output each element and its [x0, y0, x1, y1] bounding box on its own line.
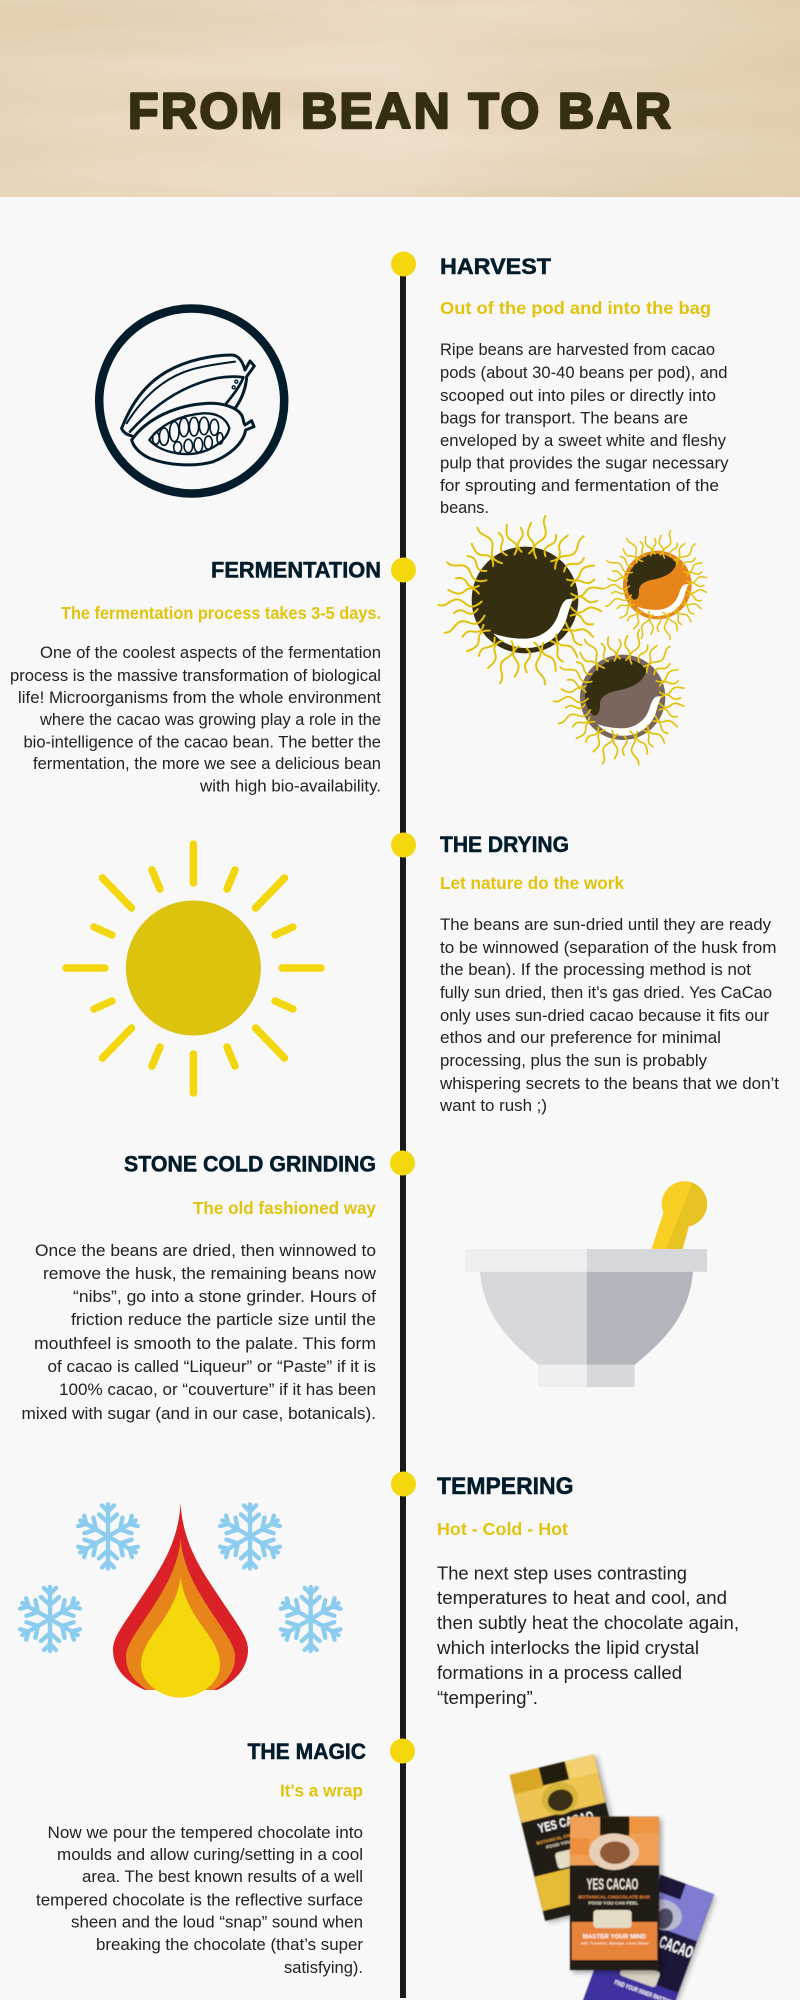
package: orange: FOOD YOU CAN FEEL — [588, 1900, 639, 1905]
text block: the drying — [439, 916, 779, 1115]
text block: the magic: sheen and the loud “snap” sound when — [71, 1914, 363, 1932]
text block: the drying: fully sun dried, then it’s gas dried. Yes CaCao — [440, 984, 772, 1002]
subheading: tempering: Hot - Cold - Hot — [437, 1519, 568, 1539]
text block: tempering: temperatures to heat and cool, and — [437, 1587, 727, 1608]
text block: fermentation: where the cacao was growing play a role in the — [39, 711, 381, 729]
text block: the drying: The beans are sun-dried until they are ready — [440, 916, 772, 934]
text block: harvest: bags for transport. The beans are — [440, 410, 688, 428]
text block: the magic: breaking the chocolate (that’s super — [96, 1936, 364, 1954]
timeline with dots — [390, 252, 416, 1998]
text block: fermentation — [10, 644, 381, 796]
package: yellow — [510, 1754, 633, 1924]
text block: harvest: Ripe beans are harvested from cacao — [440, 341, 715, 359]
text block: harvest — [440, 341, 729, 517]
panel: the magic — [36, 1739, 366, 1977]
text block: harvest: enveloped by a sweet white and fleshy — [440, 432, 727, 450]
icon: flame with snowflakes — [18, 1503, 343, 1698]
heading: the magic: THE MAGIC — [248, 1739, 366, 1764]
text block: harvest: for sprouting and fermentation of the — [440, 477, 719, 495]
text block: stone cold grinding: 100% cacao, or “couverture” if it has been — [59, 1381, 376, 1399]
text block: the magic: area. The best known results of a well — [82, 1868, 363, 1886]
text block: tempering — [436, 1562, 739, 1708]
package: orange: with Turmeric, Bacopa, Lions Mane — [581, 1941, 650, 1946]
icon: sun — [66, 844, 321, 1093]
subheading: stone cold grinding: The old fashioned way — [193, 1198, 376, 1218]
text block: harvest: pulp that provides the sugar necessary — [440, 454, 729, 472]
text block: stone cold grinding: “nibs”, go into a stone grinder. Hours of — [73, 1288, 376, 1306]
icon: snowflake — [278, 1587, 343, 1651]
package: purple: YES CACAO — [636, 1924, 696, 1962]
heading: harvest: HARVEST — [440, 254, 552, 279]
text block: fermentation: with high bio-availability. — [199, 778, 381, 796]
text block: the drying: whispering secrets to the beans that we don’t — [439, 1075, 779, 1093]
heading: stone cold grinding: STONE COLD GRINDING — [124, 1152, 376, 1176]
text block: the magic: satisfying). — [284, 1959, 363, 1977]
panel: the drying — [439, 832, 779, 1115]
package: purple — [580, 1865, 717, 2000]
title: FROM BEAN TO BAR — [128, 83, 671, 139]
package: yellow: FOOD YOU CAN FEEL — [546, 1833, 596, 1850]
panel: tempering — [436, 1473, 739, 1708]
subheading: fermentation: The fermentation process takes 3-5 days. — [61, 603, 381, 623]
text block: the drying: ethos and our preference for minimal — [440, 1029, 721, 1047]
icon: snowflake — [18, 1587, 82, 1651]
text block: tempering: which interlocks the lipid crystal — [436, 1637, 699, 1658]
package: orange: YES CACAO — [587, 1876, 638, 1893]
text block: the magic: moulds and allow curing/setting in a cool — [57, 1846, 363, 1864]
heading: fermentation: FERMENTATION — [211, 558, 381, 582]
text block: fermentation: process is the massive transformation of biological — [10, 667, 381, 685]
heading: tempering: TEMPERING — [437, 1473, 574, 1500]
text block: tempering: then subtly heat the chocolate again, — [437, 1612, 739, 1633]
subheading: harvest: Out of the pod and into the bag — [440, 298, 711, 318]
text block: stone cold grinding: Once the beans are dried, then winnowed to — [35, 1242, 376, 1260]
icon: flame — [113, 1503, 248, 1698]
text block: the drying: to be winnowed (separation of the husk from — [440, 939, 776, 957]
text block: stone cold grinding: mouthfeel is smooth to the palate. This form — [34, 1335, 376, 1353]
text block: the drying: only uses sun-dried cacao because it fits our — [440, 1007, 770, 1025]
icon: orange bean — [601, 530, 707, 640]
icon: cacao pod in circle — [99, 308, 284, 494]
text block: fermentation: fermentation, the more we see a delicious bean — [33, 755, 381, 773]
text block: stone cold grinding: remove the husk, the remaining beans now — [43, 1265, 376, 1283]
subheading: the magic: It's a wrap — [280, 1780, 363, 1800]
text block: stone cold grinding: of cacao is called “Liqueur” or “Paste” if it is — [48, 1358, 376, 1376]
text block: tempering: formations in a process called — [437, 1662, 682, 1683]
panel: fermentation — [10, 558, 381, 796]
package: yellow: YES CACAO — [537, 1809, 595, 1836]
header: wood banner — [0, 0, 800, 197]
package: yellow: BOTANICAL CHOCOLATE BAR — [536, 1825, 603, 1847]
text block: fermentation: bio-intelligence of the cacao bean. The better the — [24, 734, 381, 752]
text block: stone cold grinding: mixed with sugar (and in our case, botanicals). — [22, 1405, 376, 1423]
icon: pestle — [652, 1181, 707, 1249]
icon: brown bean — [553, 629, 684, 766]
package: orange: MASTER YOUR MIND — [583, 1935, 647, 1941]
text block: tempering: The next step uses contrasting — [437, 1562, 687, 1584]
icon: snowflake — [218, 1504, 282, 1568]
text block: harvest: beans. — [440, 499, 489, 517]
text block: the magic: Now we pour the tempered chocolate into — [48, 1824, 363, 1842]
icon: dark bean — [438, 515, 602, 685]
text block: fermentation: One of the coolest aspects of the fermentation — [40, 644, 381, 662]
icon: snowflake — [76, 1504, 140, 1568]
text block: the drying: want to rush ;) — [439, 1097, 547, 1115]
heading: the drying: THE DRYING — [440, 832, 569, 857]
text block: the magic: tempered chocolate is the reflective surface — [36, 1892, 363, 1910]
icon: mortar and pestle — [465, 1181, 707, 1387]
text block: fermentation: life! Microorganisms from the whole environment — [18, 689, 381, 707]
text block: the magic — [36, 1824, 364, 1977]
image: chocolate bar packages — [510, 1754, 717, 2000]
text block: the drying: the bean). If the processing method is not — [440, 961, 751, 979]
package: orange: BOTANICAL CHOCOLATE BAR — [578, 1894, 650, 1900]
text block: harvest: scooped out into piles or directly into — [440, 387, 716, 405]
text block: stone cold grinding — [22, 1242, 376, 1423]
package: orange — [570, 1817, 662, 1973]
text block: stone cold grinding: friction reduce the particle size until the — [71, 1311, 376, 1329]
text block: harvest: pods (about 30-40 beans per pod), and — [440, 364, 728, 382]
panel: harvest — [440, 254, 729, 517]
text block: tempering: “tempering”. — [437, 1687, 538, 1708]
icon: fermenting beans — [438, 515, 707, 766]
subheading: the drying: Let nature do the work — [440, 873, 624, 893]
panel: stone cold grinding — [22, 1152, 376, 1423]
text block: the drying: processing, plus the sun is probably — [440, 1052, 708, 1070]
